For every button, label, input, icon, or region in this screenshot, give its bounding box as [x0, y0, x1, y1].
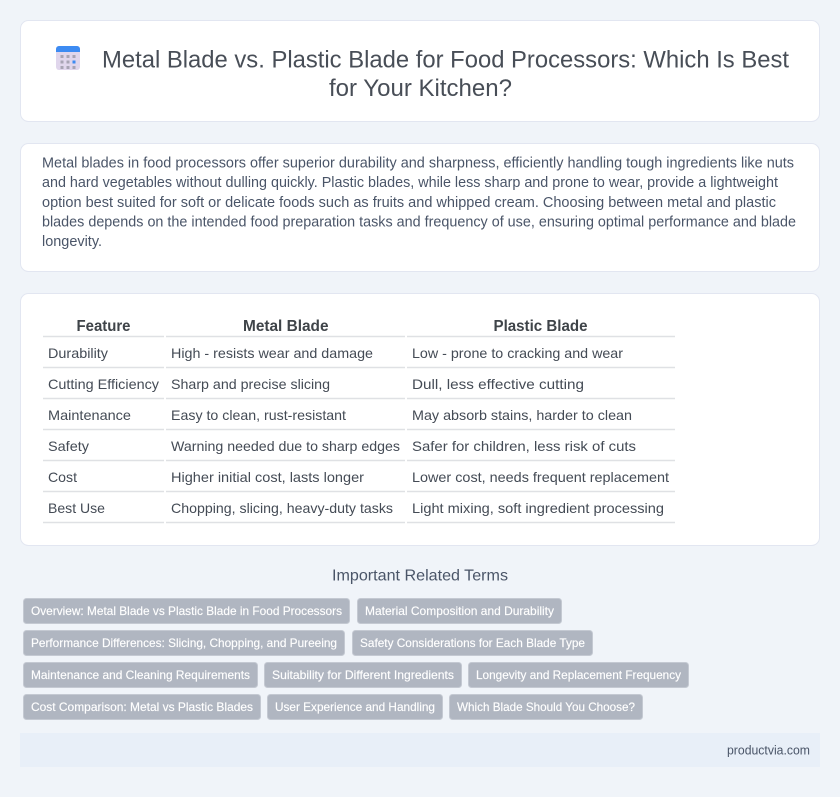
table row: durability: Durability [48, 345, 108, 361]
tag: Which Blade Should You Choose? [457, 700, 635, 714]
table row: cutting efficiency: Sharp and precise slicing [171, 376, 330, 392]
table row: safety: Warning needed due to sharp edges [171, 438, 400, 454]
table row: safety: Safer for children, less risk of cuts [412, 438, 636, 454]
table row: safety: Safety [48, 438, 89, 454]
footer [20, 733, 820, 767]
table row: maintenance: Easy to clean, rust-resistant [171, 407, 346, 423]
table row: best use: Chopping, slicing, heavy-duty tasks [171, 500, 393, 516]
footer source: productvia.com [727, 744, 810, 758]
tag [450, 694, 642, 720]
panel: comparison table [20, 294, 820, 546]
tag: User Experience and Handling [275, 700, 435, 714]
icon: calendar grid [56, 46, 80, 70]
tag: Maintenance and Cleaning Requirements [31, 668, 250, 682]
summary paragraph: Metal blades in food processors offer superior durability and sharpness, efficiently handling tough ingredients like nuts [42, 156, 794, 172]
tag: Safety Considerations for Each Blade Type [360, 636, 585, 650]
table row: maintenance [48, 407, 632, 423]
table row: durability [48, 345, 623, 361]
tag [268, 694, 442, 720]
table row: cost: Lower cost, needs frequent replacement [412, 469, 669, 485]
title: Metal Blade vs. Plastic Blade for Food Processors: Which Is Best [102, 46, 789, 74]
heading: important related terms: Important Related Terms [332, 568, 508, 584]
table row: cutting efficiency: Cutting Efficiency [48, 376, 159, 392]
table row: maintenance: May absorb stains, harder to clean [412, 407, 632, 423]
tag [24, 630, 344, 656]
table row: cutting efficiency: Dull, less effective cutting [412, 376, 584, 392]
tag [24, 662, 258, 688]
tag [24, 598, 350, 624]
table row: durability: High - resists wear and damage [171, 345, 373, 361]
tag: Overview: Metal Blade vs Plastic Blade in Food Processors [31, 604, 342, 618]
tag group: related terms [24, 598, 688, 720]
summary paragraph: and hard vegetables without dulling quickly. Plastic blades, while less sharp and prone to wear, provide a lightweight [42, 175, 778, 191]
summary paragraph: longevity. [42, 234, 102, 250]
tag: Cost Comparison: Metal vs Plastic Blades [31, 700, 253, 714]
tag [264, 662, 462, 688]
title: for Your Kitchen? [329, 75, 512, 102]
table header: Feature [76, 318, 131, 335]
table header [76, 318, 588, 335]
table row: best use [48, 500, 664, 516]
table row: cost: Higher initial cost, lasts longer [171, 469, 364, 485]
tag [352, 630, 592, 656]
panel: title header [20, 20, 820, 122]
tag: Material Composition and Durability [365, 604, 554, 618]
summary paragraph: blades depends on the intended food preparation tasks and frequency of use, ensuring optimal performance and blade [42, 214, 796, 230]
table row: cutting efficiency [48, 376, 584, 392]
table row: best use: Best Use [48, 500, 105, 516]
table row: cost: Cost [48, 469, 77, 485]
tag: Longevity and Replacement Frequency [476, 668, 681, 682]
tag: Suitability for Different Ingredients [272, 668, 454, 682]
panel: summary text [20, 144, 820, 272]
table header: Metal Blade [243, 318, 329, 335]
tag [358, 598, 562, 624]
table row: safety [48, 438, 636, 454]
table row: best use: Light mixing, soft ingredient processing [412, 500, 664, 516]
table row: cost [48, 469, 669, 485]
tag [468, 662, 688, 688]
summary paragraph [42, 156, 796, 250]
tag: Performance Differences: Slicing, Chopping, and Pureeing [31, 636, 337, 650]
table row: maintenance: Maintenance [48, 407, 131, 423]
table header: Plastic Blade [494, 318, 588, 335]
table row: durability: Low - prone to cracking and wear [412, 345, 623, 361]
summary paragraph: option best suited for soft or delicate foods such as fruits and whipped cream. Choosing between metal and plastic [42, 195, 776, 211]
tag [24, 694, 260, 720]
title [102, 46, 789, 102]
